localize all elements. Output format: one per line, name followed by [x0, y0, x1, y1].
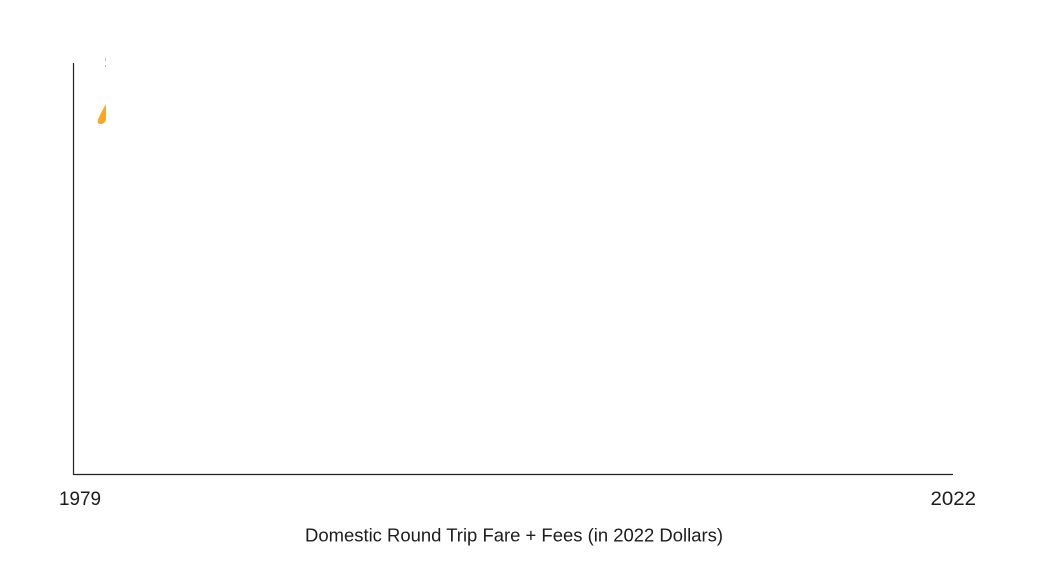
- end year label: 2022: [930, 488, 976, 510]
- start year label: 1979: [59, 488, 101, 510]
- orange data area: [98, 104, 106, 124]
- x axis: [73, 474, 953, 476]
- axis title: Domestic Round Trip Fare + Fees (in 2022 Dollars): [305, 526, 723, 546]
- y axis: [72, 63, 74, 475]
- faint data marks: [105, 58, 106, 67]
